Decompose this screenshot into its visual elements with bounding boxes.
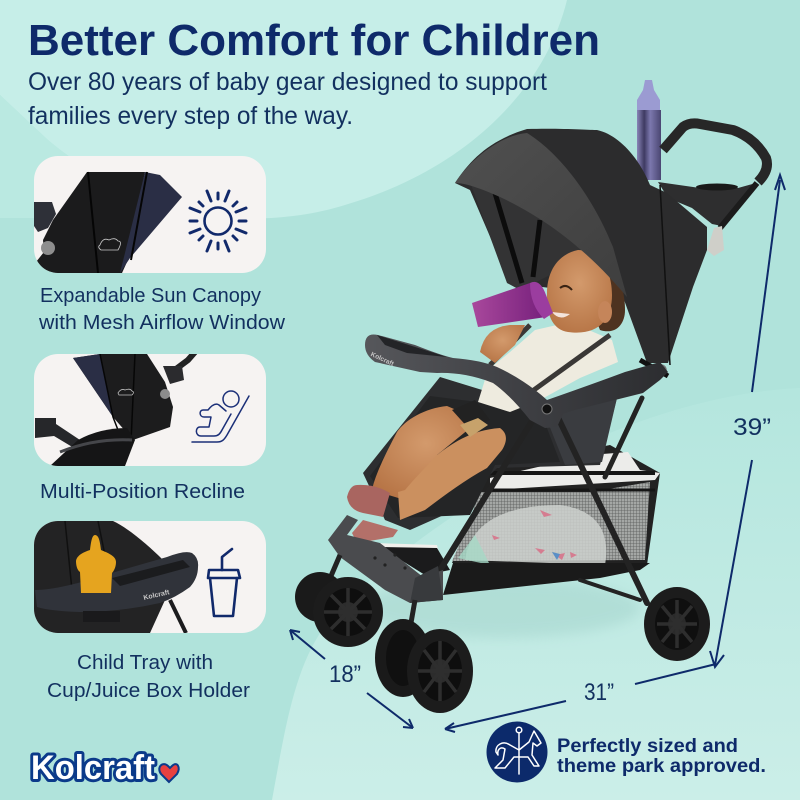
label: sun canopy [38,285,286,334]
label: 39 inches: 39” [733,414,771,441]
panel: tray [34,521,266,633]
badge: carousel horse [486,722,548,782]
stroller illustration [295,80,767,713]
photo: recline detail [35,352,195,466]
icon: heart [159,764,179,782]
wheel: right rear [644,587,710,661]
callout: theme park approved: Perfectly sized and [557,736,738,757]
arm [480,325,525,363]
subtitle [28,68,547,130]
harness straps [490,325,610,400]
photo: tray detail: Kolcraft [143,589,171,602]
child tray and arm [365,334,668,428]
front leg [398,428,506,520]
icon: cup with straw [208,549,240,616]
shoes [347,485,398,543]
footrest [328,515,443,603]
label: tray: Cup/Juice Box Holder [47,680,250,702]
shirt [478,322,618,412]
dimension: length 31 [445,664,716,732]
label: tray [47,652,250,702]
handle [663,123,767,182]
storage basket [443,445,660,595]
icon: sun [190,191,246,251]
ground shadow [360,578,640,638]
seat [363,377,617,575]
water bottle [637,80,661,180]
subtitle: families every step of the way. [28,102,353,130]
title: Better Comfort for Children [28,16,600,65]
parent tray and cup holder [658,182,757,256]
photo: canopy detail [34,172,182,273]
visor [455,133,627,297]
label: 18 inches: 18” [329,661,361,688]
dimension: height 39 [710,175,785,667]
dimension: width 18 [290,630,413,728]
label: sun canopy: Expandable Sun Canopy [40,285,261,307]
label: recline: Multi-Position Recline [40,481,245,503]
canopy [455,129,707,376]
label: 31 inches: 31” [584,679,614,706]
baby [347,250,625,543]
callout: theme park approved [557,736,766,777]
logo: Kolcraft: Kolcraft [31,749,155,787]
buckle [452,400,490,430]
icon: reclined seat [192,391,249,442]
panel: recline [34,352,266,466]
hair [580,255,625,331]
back leg [372,406,480,500]
callout: theme park approved: theme park approved. [557,756,766,777]
panel: sun canopy [34,156,266,273]
cup [76,535,116,593]
subtitle: Over 80 years of baby gear designed to support [28,68,547,96]
label: sun canopy: with Mesh Airflow Window [38,312,286,334]
photo: tray detail [34,521,198,633]
face [547,250,612,333]
front wheels [295,555,473,713]
child tray and arm: Kolcraft [369,351,395,368]
main frame [437,398,647,603]
label: tray: Child Tray with [77,652,213,674]
sippy cup [472,282,553,327]
